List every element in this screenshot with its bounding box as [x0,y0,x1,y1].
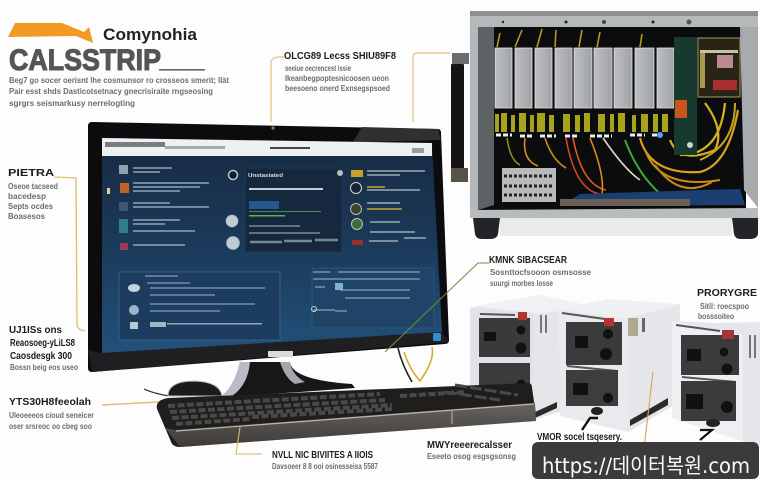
circuit board [674,37,697,155]
callout text: Boasesos [8,212,46,221]
callout: ups: Sosnttocfsooon osmsosse [490,268,592,277]
intro text: sgrgrs seismarkusy nerrelogting [9,99,135,108]
ups unit: right [672,321,760,445]
leader lines [271,53,450,122]
yellow connectors [495,113,668,132]
heading: CALSSTRIP [9,44,161,77]
lower bezel reflection [88,332,449,372]
callout: bottom centre: MWYreeerecalsser [427,440,512,451]
server chassis [451,11,758,239]
computer monitor [88,122,449,372]
lid [470,11,758,27]
title block [8,23,229,108]
dashboard lower left panel [119,272,280,340]
dashboard left list [107,165,209,250]
callout text: seeiue oecrencest issie [285,64,351,73]
interior [478,26,746,210]
intro text: Pair esst shds Dasticotsetnacy gnecrisiraite rngseosing [9,87,213,96]
base tray [470,189,758,218]
handle [451,53,469,182]
status lights [496,135,662,136]
cord [700,430,712,440]
callout: bottom centre: Eseeto osog esgsgsonsg [427,452,516,461]
callout: bottom right: VMOR socel tsqesery. [537,432,622,443]
callout: right: bosssoiteo [698,312,734,321]
callout text: bacedesp [8,192,46,201]
callout: left middle: UJ1ISs ons [9,325,62,336]
leader line [645,372,653,452]
leader line [102,402,158,405]
icon: orange arrow [8,23,93,43]
dashboard lower right panel [312,268,434,328]
feet [473,218,758,239]
keyboard body [157,383,536,447]
callout text [8,182,58,221]
callout: keyboard: NVLL NIC BIVIITES A IIOIS [272,450,373,461]
callout: left upper [8,168,85,331]
top wiring [497,29,642,47]
floor shadow [500,218,732,236]
dashboard start button [433,333,441,341]
callout: bottom centre [427,440,516,461]
dashboard round icons [226,170,239,249]
watermark [532,442,759,479]
callout text: Oseoe tacseed [8,182,58,191]
cord [582,418,598,430]
upper panel [479,318,530,357]
callout: left middle: Caosdesgk 300 [10,351,72,362]
heading underline [159,69,205,71]
callout: left lower: Uleoeeeos cioud seneicer [9,411,94,420]
leader line [385,263,489,352]
upper panel [681,335,739,375]
callout: ups: suurgi morbes losse [490,279,553,288]
watermark: https://데이터복원.com [542,454,750,478]
callout: left middle: Bossn beig eos useo [10,363,78,372]
webcam [271,126,275,130]
ups unit: centre [558,299,680,432]
lower panel [479,363,530,402]
monitor stand [222,362,355,396]
casing [672,321,760,445]
lower panel [681,381,736,421]
callout: right: Sitil: roecspoo [700,302,749,311]
bezel [88,122,449,372]
mouse [144,381,222,396]
label strip [676,325,736,382]
callout: left lower: YTS30H8feeolah [9,397,91,408]
subtitle: Comynohia [103,26,198,44]
callout: left lower [9,397,158,431]
dashboard right list [337,170,426,245]
callout: left middle: Reaosoeg-yLiLS8 [10,338,75,349]
casing [470,295,600,420]
callout text [285,64,390,93]
controls [484,312,527,388]
callout text: beesoeno onerd Exnsegspsoed [285,84,390,93]
callout heading: PIETRA [8,168,54,179]
side marks [750,335,755,358]
callout: left lower: oser srsreoc oo cbeg soo [9,422,92,431]
power modules [495,48,674,108]
callout: right: PRORYGRE [697,288,757,299]
callout text: Septs ocdes [8,202,54,211]
leader line [236,427,262,454]
intro text: Beg7 go socer oerisnt lhe cosmunsor ro crosseos smerit; Ilàt [9,76,229,85]
intro text [9,76,229,108]
screen [102,138,442,353]
upper panel [566,322,622,365]
casing [558,299,680,318]
callout: ups [385,255,592,352]
glossy corner [353,127,441,142]
lower panel [566,370,618,406]
dashboard centre panel: Unstasiated [248,173,283,179]
callout: bottom right [537,372,653,452]
callout heading: OLCG89 Lecss SHIU89F8 [284,51,396,62]
ups unit: left [470,295,600,420]
cables [507,103,738,200]
keyboard front edge [165,403,536,447]
relay box [698,38,740,97]
leader line [54,177,85,331]
keys [168,385,518,424]
monitor cables [398,347,432,382]
side panels [470,27,758,218]
controls [686,330,734,427]
side marks [541,315,546,333]
label strip [562,313,617,371]
dashboard centre panel [245,168,342,252]
terminal block [502,168,556,202]
controls [573,318,645,415]
browser toolbar [102,138,432,156]
callout: keyboard [236,427,378,471]
callout: ups: KMNK SIBACSEAR [489,255,568,266]
callout: keyboard: Davsoeer 8 8 ooi osinesseisa 5587 [272,462,378,471]
brand plate [268,351,293,357]
callout: left middle [9,325,78,372]
callout: top centre [271,51,450,122]
label strip [480,314,515,315]
callout text: Ikeanbegpoptesnicoosen ueon [285,74,389,83]
callout: right [697,288,757,321]
keyboard [157,383,536,447]
